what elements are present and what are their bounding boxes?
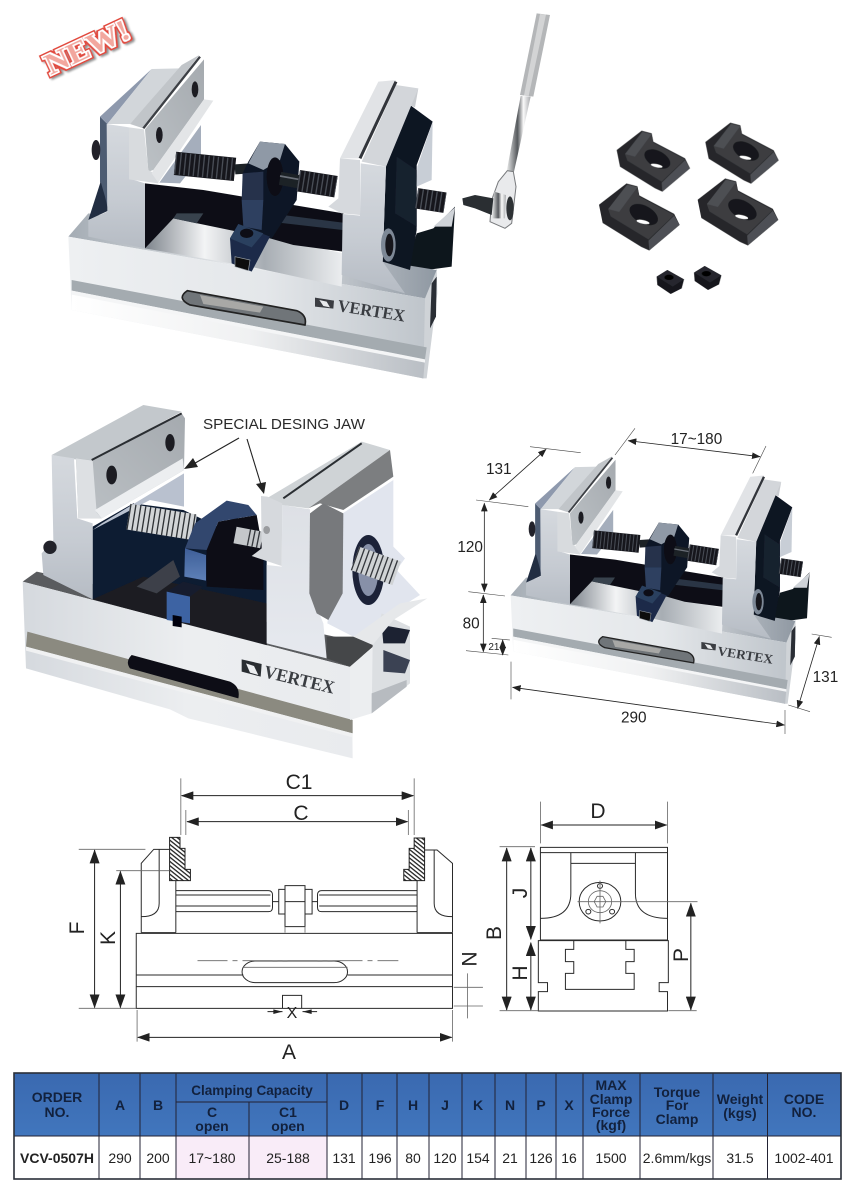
label: X: X xyxy=(287,1005,298,1022)
photo: dimensioned vise xyxy=(511,456,810,704)
logo text: VERTEX on dimensioned vise: VERTEX xyxy=(717,643,775,667)
table header row: Clamp xyxy=(656,1111,698,1127)
label: J: J xyxy=(509,888,532,898)
table header row: open xyxy=(271,1118,305,1134)
table header row: For xyxy=(666,1097,689,1113)
table header row: C xyxy=(207,1104,217,1120)
dimension callouts on photo: 290 xyxy=(621,710,647,727)
table header row: NO. xyxy=(792,1104,816,1120)
technical drawing: front view xyxy=(66,771,483,1064)
table header row: H xyxy=(408,1097,418,1113)
table header row: D xyxy=(339,1097,349,1113)
label: C: C xyxy=(293,802,309,825)
dimension callouts on photo: 131 xyxy=(813,669,838,686)
dimension callouts on photo: 120 xyxy=(457,539,483,556)
table header row: ORDER xyxy=(32,1089,82,1105)
dimension callouts on photo: 131 xyxy=(486,461,512,478)
table header row: Clamping Capacity xyxy=(191,1083,313,1098)
table header row: NO. xyxy=(45,1104,69,1120)
callout: special jaw: SPECIAL DESING JAW xyxy=(203,416,366,433)
table header row: Clamp xyxy=(590,1091,632,1107)
photo: main vise with handle xyxy=(68,55,455,378)
dimension callouts on photo xyxy=(457,428,838,734)
dimension callouts on photo: 17~180 xyxy=(671,431,722,448)
table data row: 200 xyxy=(146,1150,170,1166)
table header row: A xyxy=(115,1097,125,1113)
table data row: 196 xyxy=(368,1150,392,1166)
label: F: F xyxy=(66,922,89,934)
label: B: B xyxy=(483,926,506,940)
table header row: (kgf) xyxy=(596,1117,626,1133)
label: D: D xyxy=(590,800,606,823)
specification table xyxy=(14,1073,841,1179)
table header row: C1 xyxy=(279,1104,297,1120)
table header row: Weight xyxy=(717,1091,764,1107)
label: K: K xyxy=(97,931,120,945)
table header row: X xyxy=(564,1097,574,1113)
label: C1: C1 xyxy=(286,771,312,794)
table data row: 17~180 xyxy=(188,1150,236,1166)
table data row: 16 xyxy=(561,1150,577,1166)
table header row: P xyxy=(536,1097,546,1113)
label: H: H xyxy=(509,965,532,981)
logo text: VERTEX on main vise: VERTEX xyxy=(336,296,407,326)
table header row: Force xyxy=(592,1104,630,1120)
table data row: 1002-401 xyxy=(774,1150,834,1166)
table header row: Torque xyxy=(654,1084,700,1100)
table data row: 25-188 xyxy=(266,1150,310,1166)
table header row: CODE xyxy=(784,1091,824,1107)
table data row: 120 xyxy=(433,1150,457,1166)
technical drawing: side view xyxy=(483,800,698,1011)
table header row: J xyxy=(441,1097,449,1113)
dimension callouts on photo: 80 xyxy=(463,616,480,633)
table data row: 154 xyxy=(466,1150,490,1166)
dimension callouts on photo: 21 xyxy=(488,642,500,653)
badge: NEW!: NEW! xyxy=(39,13,135,81)
table data row: 290 xyxy=(108,1150,132,1166)
table data row: 80 xyxy=(405,1150,421,1166)
photo: vise with special jaw xyxy=(23,405,427,758)
logo text: VERTEX on jaw vise: VERTEX xyxy=(262,661,337,698)
table data row: 1500 xyxy=(595,1150,627,1166)
photo: ratchet wrench xyxy=(462,13,550,228)
label: N: N xyxy=(457,951,480,967)
table data row: 131 xyxy=(332,1150,356,1166)
table header row: MAX xyxy=(595,1077,627,1093)
callout: special jaw xyxy=(184,416,366,494)
table data row xyxy=(20,1150,834,1166)
table header row xyxy=(32,1077,824,1134)
table header row: open xyxy=(195,1118,229,1134)
table data row: 2.6mm/kgs xyxy=(643,1150,711,1166)
table header row: (kgs) xyxy=(723,1105,757,1121)
table header row: F xyxy=(376,1097,385,1113)
table data row: 126 xyxy=(529,1150,553,1166)
label: P: P xyxy=(670,948,693,962)
table data row: 21 xyxy=(502,1150,518,1166)
photo: clamp accessories xyxy=(599,123,779,294)
table header row: K xyxy=(473,1097,483,1113)
table header row: N xyxy=(505,1097,515,1113)
table header row: B xyxy=(153,1097,163,1113)
table data row: 31.5 xyxy=(726,1150,754,1166)
table data row: VCV-0507H xyxy=(20,1150,94,1166)
label: A: A xyxy=(282,1041,296,1064)
